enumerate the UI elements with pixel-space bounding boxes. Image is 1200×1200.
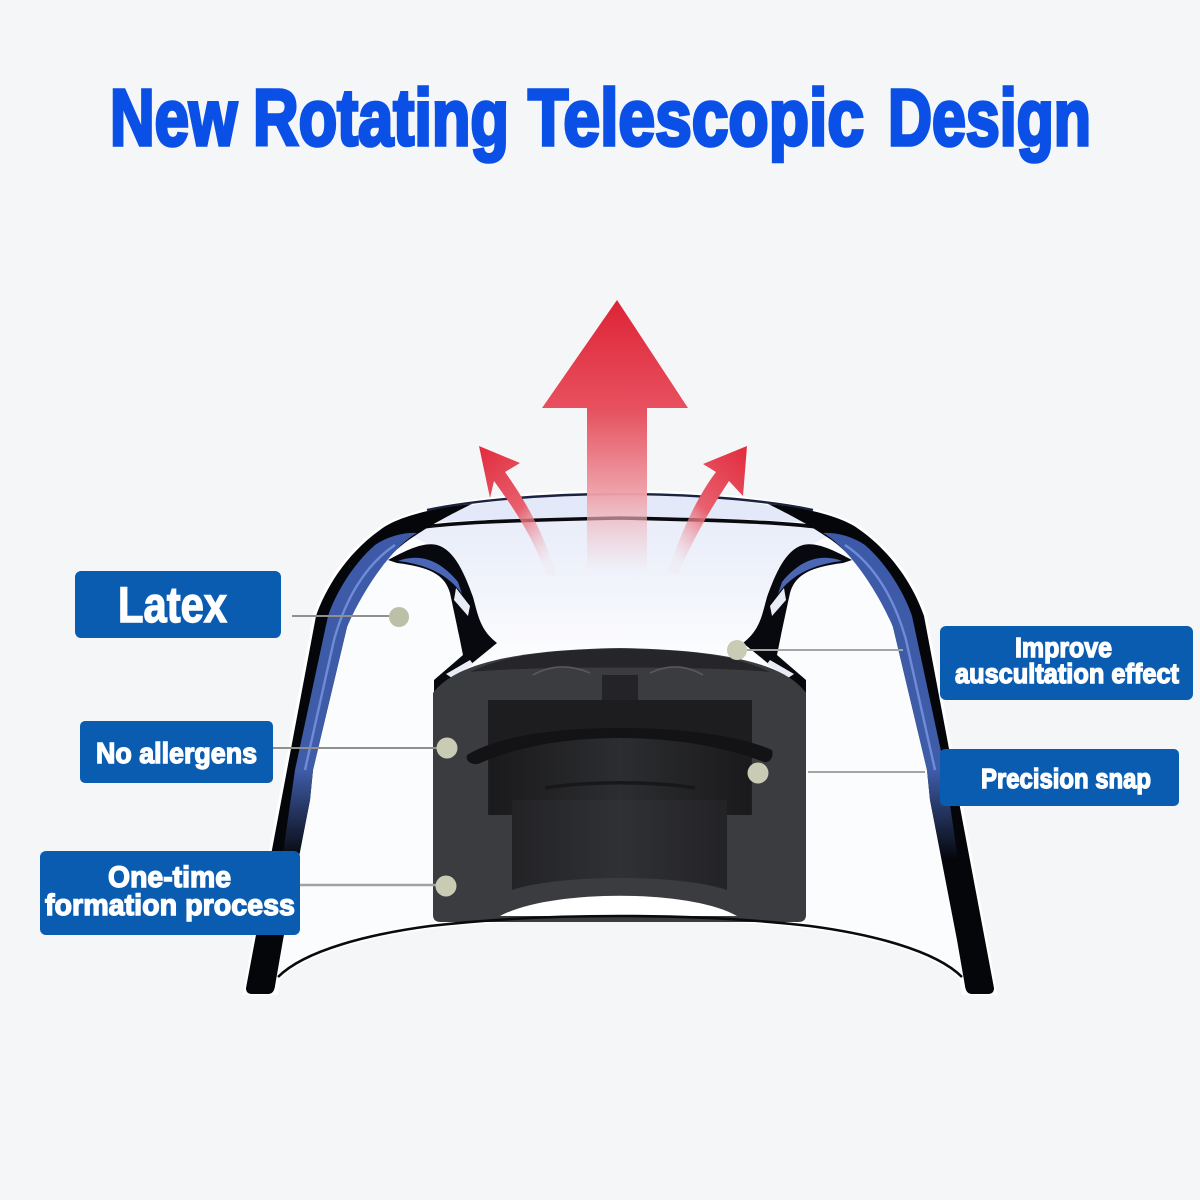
callout: Precision snap — [748, 749, 1179, 806]
label box — [40, 851, 300, 935]
black core housing — [433, 648, 806, 922]
label text: Latex — [118, 577, 227, 633]
label box — [940, 626, 1193, 700]
flange interior — [397, 518, 843, 643]
callout: No allergens — [80, 721, 458, 783]
core center notch — [602, 675, 638, 701]
title — [110, 73, 1091, 162]
left red arrow — [479, 446, 556, 575]
leader line — [808, 771, 925, 773]
label text: Precision snap — [981, 763, 1151, 794]
ear tip illustration — [246, 493, 994, 994]
label text line 1: One-time — [108, 861, 231, 894]
left blue wall — [282, 533, 417, 860]
leader line — [272, 747, 438, 749]
arrow head — [542, 300, 688, 408]
marker dot — [748, 762, 768, 784]
inner cavity — [488, 700, 752, 815]
label box — [75, 571, 281, 638]
title: Rotating — [253, 73, 509, 162]
label box — [80, 721, 273, 783]
label text line 2: formation process — [45, 889, 295, 922]
right wall and inner curl — [743, 504, 994, 994]
flange top line — [427, 494, 813, 510]
flange rear line — [397, 518, 843, 532]
flange top surface — [400, 494, 840, 526]
right curl blue — [778, 558, 842, 594]
snap ridge — [467, 728, 773, 764]
leader line — [745, 649, 903, 651]
label text line 2: auscultation effect — [955, 658, 1179, 689]
callout: Improve auscultation effect — [727, 626, 1193, 700]
ear tip body — [246, 493, 994, 992]
leader line — [300, 884, 437, 886]
marker dot — [389, 607, 409, 627]
right wall highlight — [845, 545, 935, 770]
right blue wall — [823, 533, 958, 860]
white bottom notch — [500, 896, 737, 916]
title: Telescopic — [528, 73, 864, 162]
left inner curl — [388, 544, 497, 693]
center red arrow — [542, 300, 688, 573]
callout: One-time formation process — [40, 851, 456, 935]
right inner curl — [743, 544, 852, 693]
right black wall — [768, 504, 994, 994]
title: Design — [888, 73, 1091, 162]
label text: No allergens — [96, 738, 257, 770]
callout: Latex — [75, 571, 409, 638]
arrow shaft — [587, 408, 647, 573]
right red arrow — [668, 446, 747, 575]
core dome shading — [470, 649, 770, 672]
left curl blue — [398, 558, 462, 594]
inner cavity shade — [490, 734, 750, 815]
label box — [940, 749, 1179, 806]
right curl streaks — [767, 588, 794, 678]
marker dot — [727, 640, 747, 660]
left wall highlight — [305, 545, 395, 770]
lower tube — [512, 800, 727, 890]
leader line — [292, 615, 390, 617]
bottom rim curve — [278, 916, 962, 977]
left wall and inner curl — [246, 504, 497, 994]
left curl streaks — [446, 588, 473, 678]
label text line 1: Improve — [1015, 632, 1112, 663]
title: New — [110, 73, 238, 162]
dome arc marks — [533, 667, 703, 675]
tube ring line — [545, 783, 695, 788]
marker dot — [436, 738, 458, 758]
marker dot — [436, 876, 456, 896]
left black wall — [246, 504, 472, 994]
